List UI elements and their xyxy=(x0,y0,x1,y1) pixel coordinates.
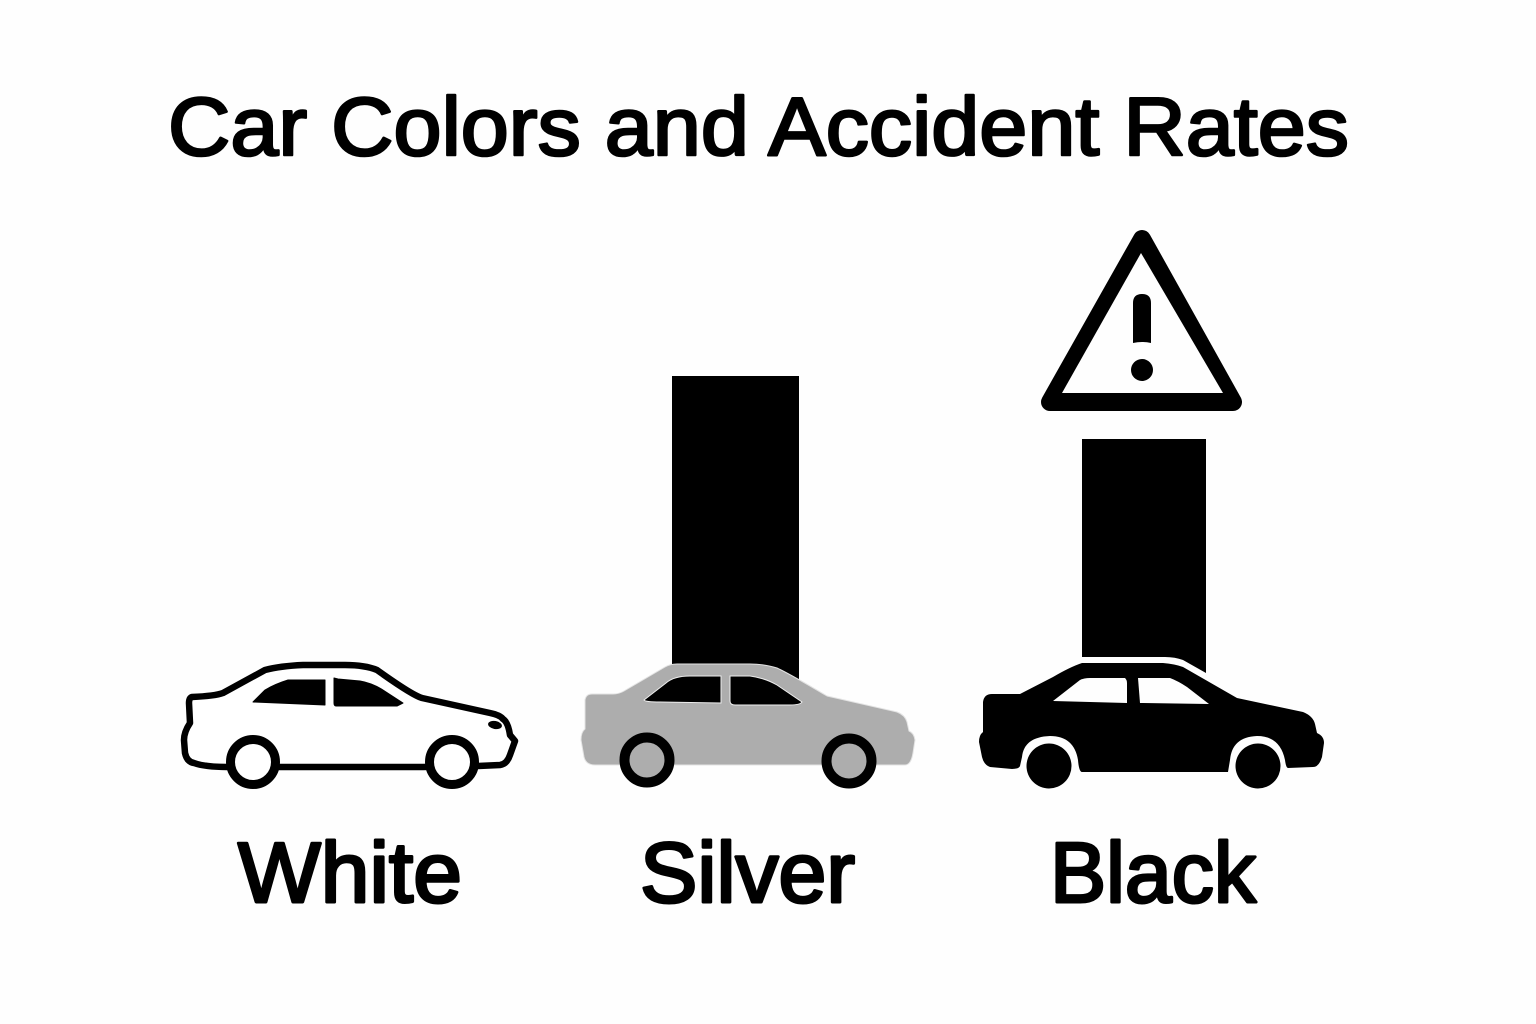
front wheel xyxy=(430,740,474,784)
icon: silver car xyxy=(581,664,915,784)
column: silver car xyxy=(581,376,915,921)
label: White: White xyxy=(238,826,462,921)
warning triangle icon xyxy=(1050,239,1233,402)
exclamation stroke xyxy=(1133,294,1151,343)
rear wheel xyxy=(1026,744,1072,788)
headlight xyxy=(487,720,503,730)
triangle interior xyxy=(1062,253,1223,393)
exclamation dot xyxy=(1131,359,1153,381)
rear wheel xyxy=(230,740,276,784)
title: Car Colors and Accident Rates xyxy=(168,80,1349,173)
car body xyxy=(581,664,915,765)
rear window xyxy=(1053,678,1127,703)
label: Black: Black xyxy=(1050,826,1256,921)
column: black car xyxy=(979,239,1324,921)
front wheel xyxy=(1236,744,1280,788)
rear window xyxy=(253,680,325,705)
front window xyxy=(730,676,802,705)
front wheel xyxy=(826,738,872,784)
bar: black xyxy=(1082,439,1206,673)
column: white car xyxy=(184,665,515,921)
triangle outline xyxy=(1050,239,1233,402)
rear wheel xyxy=(624,738,670,782)
rear window xyxy=(644,676,721,703)
icon: black car xyxy=(979,663,1324,788)
bar: silver xyxy=(672,376,799,686)
front window xyxy=(334,678,403,706)
car body xyxy=(979,663,1324,772)
car body outline xyxy=(184,665,515,767)
icon: white car xyxy=(184,665,515,784)
label: Silver: Silver xyxy=(640,826,855,921)
front window xyxy=(1138,678,1209,704)
